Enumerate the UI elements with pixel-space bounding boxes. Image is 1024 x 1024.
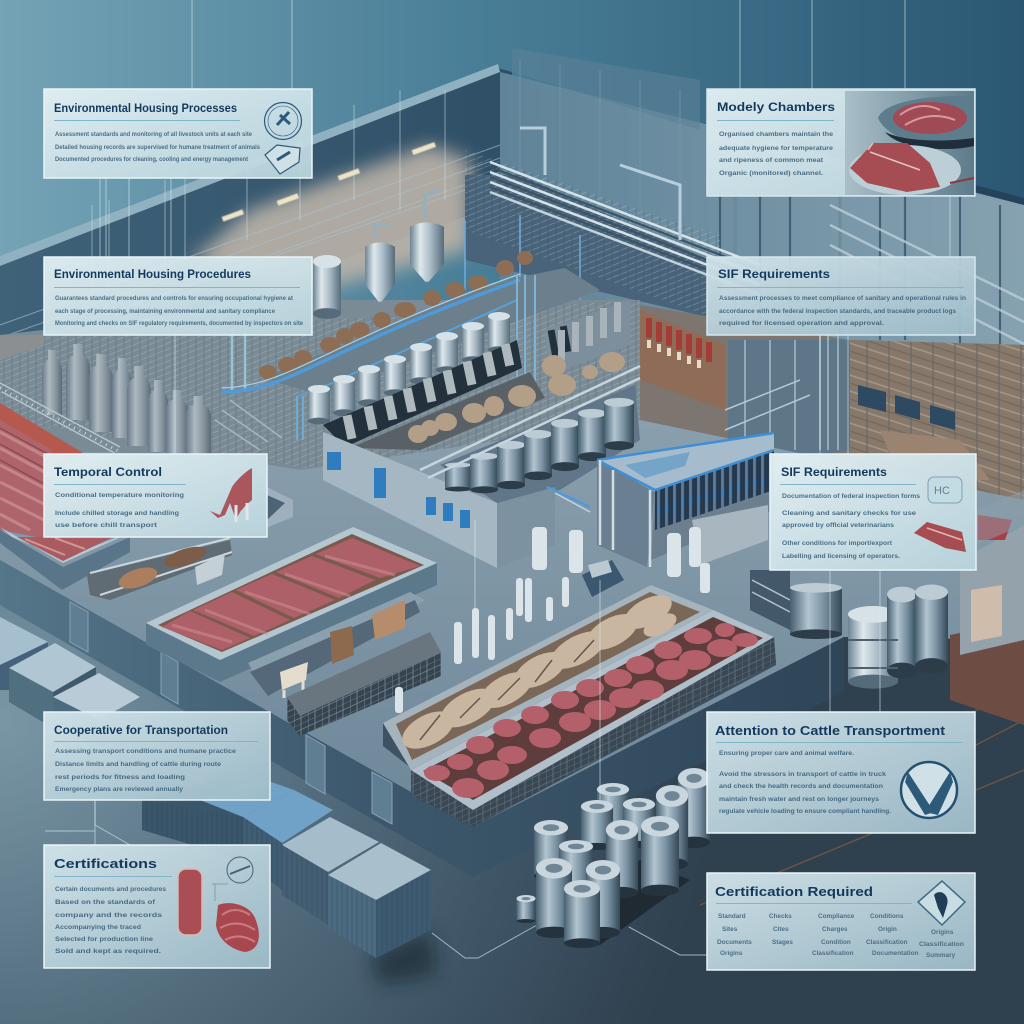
body text: Cleaning and sanitary checks for use bbox=[782, 510, 916, 517]
heading: Environmental Housing Processes bbox=[54, 103, 237, 115]
panel: cooperative for transportation bbox=[44, 712, 270, 800]
third box bbox=[243, 790, 333, 843]
body text: Organic (monitored) channel. bbox=[719, 170, 823, 177]
body text: Guarantees standard procedures and controls for ensuring occupational hygiene at bbox=[55, 295, 294, 302]
body text: adequate hygiene for temperature bbox=[719, 145, 833, 152]
lower containers bbox=[142, 777, 436, 985]
icon: diamond badge bbox=[918, 881, 965, 925]
body text: each stage of processing, maintaining environmental and sanitary compliance bbox=[55, 308, 275, 315]
mid band of machinery bbox=[0, 300, 640, 480]
body text: Assessment standards and monitoring of all livestock units at each site bbox=[55, 131, 252, 138]
body text: approved by official veterinarians bbox=[782, 522, 894, 529]
requirements table: Origins bbox=[931, 929, 954, 936]
heading: Attention to Cattle Transportment bbox=[715, 723, 946, 738]
dark crate conveyor bbox=[287, 632, 441, 736]
workers bbox=[395, 527, 710, 713]
body text bbox=[719, 750, 891, 815]
body text: use before chill transport bbox=[55, 522, 158, 529]
icon: meat cuts and blade bbox=[178, 857, 259, 952]
icon: seals bbox=[264, 102, 302, 174]
requirements table: Documentation bbox=[872, 950, 919, 957]
requirements table: Classification bbox=[812, 950, 854, 957]
heading: Certifications bbox=[54, 857, 157, 871]
requirements table: Documents bbox=[717, 939, 752, 946]
conveyor with livestock bbox=[248, 592, 425, 698]
body text: Labelling and licensing of operators. bbox=[782, 553, 900, 560]
body text bbox=[55, 748, 236, 793]
body text bbox=[55, 131, 260, 163]
blue framed rig bbox=[597, 433, 790, 630]
heading: SIF Requirements bbox=[718, 267, 830, 281]
heading: Certification Required bbox=[715, 884, 873, 899]
requirements table bbox=[717, 913, 964, 959]
heading: Temporal Control bbox=[54, 465, 162, 479]
body text: Sold and kept as required. bbox=[55, 948, 161, 955]
body text: Include chilled storage and handling bbox=[55, 510, 179, 517]
body text: Emergency plans are reviewed annually bbox=[55, 786, 183, 793]
body text: Assessing transport conditions and humane practice bbox=[55, 748, 236, 755]
body text bbox=[782, 493, 920, 560]
requirements table: Summary bbox=[926, 952, 956, 959]
body text: Distance limits and handling of cattle during route bbox=[55, 761, 221, 768]
panel: SIF requirements bbox=[707, 257, 975, 335]
body text: Selected for production line bbox=[55, 936, 153, 943]
large meat tray center left bbox=[146, 527, 437, 682]
panel: SIF requirements with meat bbox=[770, 454, 976, 570]
red meat cuts tray bbox=[411, 610, 776, 827]
top left red meat tray bbox=[0, 403, 83, 540]
requirements table: Stages bbox=[772, 939, 793, 946]
body text: rest periods for fitness and loading bbox=[55, 774, 185, 781]
body text: Based on the standards of bbox=[55, 899, 156, 906]
heading: Modely Chambers bbox=[717, 100, 835, 114]
body text: company and the records bbox=[55, 912, 162, 919]
icon: cow bbox=[210, 468, 252, 522]
body text: Ensuring proper care and animal welfare. bbox=[719, 750, 854, 757]
icon: crossed knives bbox=[901, 762, 957, 818]
warm processing hall right bbox=[640, 305, 1024, 520]
factory rear wall bbox=[0, 64, 512, 380]
body text: and check the health records and documentation bbox=[719, 783, 883, 790]
body text: Monitoring and checks on SIF regulatory requirements, documented by inspectors on site bbox=[55, 320, 303, 327]
main platform floor bbox=[0, 420, 1024, 877]
body text: Certain documents and procedures bbox=[55, 886, 166, 893]
central tanks and dark pens bbox=[308, 300, 630, 450]
panel: certification required bbox=[707, 873, 975, 970]
body text bbox=[55, 492, 184, 529]
panel: environmental housing processes bbox=[44, 89, 312, 178]
central processing block bbox=[323, 366, 640, 568]
body text: required for licensed operation and approval. bbox=[719, 320, 884, 327]
panel: certifications bbox=[44, 845, 270, 968]
heading: Environmental Housing Procedures bbox=[54, 269, 251, 281]
body text: Accompanying the traced bbox=[55, 924, 141, 931]
requirements table: Sites bbox=[722, 926, 738, 933]
left lower meat tray bbox=[0, 487, 293, 590]
requirements table: Classification bbox=[866, 939, 908, 946]
panel: temperature control bbox=[44, 454, 267, 537]
photo: meat on plates bbox=[845, 91, 974, 195]
sheep on the floor bbox=[408, 352, 625, 443]
body text bbox=[55, 295, 303, 327]
tanks back left row bbox=[0, 330, 282, 458]
brown floor and far right building bbox=[950, 490, 1024, 725]
body text: Conditional temperature monitoring bbox=[55, 492, 184, 499]
panel connector lines bbox=[95, 0, 950, 845]
body text bbox=[55, 886, 166, 955]
upper left containers bbox=[0, 617, 140, 745]
requirements table: Classification bbox=[919, 941, 964, 948]
body text: and ripeness of common meat bbox=[719, 157, 824, 164]
body text: accordance with the federal inspection standards, and traceable product logs bbox=[719, 308, 956, 315]
body text bbox=[719, 295, 966, 327]
requirements table: Origin bbox=[878, 926, 897, 933]
front box bbox=[370, 930, 436, 985]
requirements table: Cites bbox=[773, 926, 789, 933]
body text: Detailed housing records are supervised for humane treatment of animals bbox=[55, 144, 260, 151]
body text: maintain fresh water and rest on longer journeys bbox=[719, 796, 879, 803]
requirements table: Compliance bbox=[818, 913, 855, 920]
requirements table: Origins bbox=[720, 950, 743, 957]
heading: Cooperative for Transportation bbox=[54, 723, 228, 737]
body text: Avoid the stressors in transport of cattle in truck bbox=[719, 771, 886, 778]
panel: attention to cattle transport bbox=[707, 712, 975, 833]
body text: Documentation of federal inspection forms bbox=[782, 493, 920, 500]
body text: Organised chambers maintain the bbox=[719, 131, 833, 138]
glass wall right bbox=[500, 48, 1024, 470]
second box bbox=[282, 817, 379, 872]
dark machinery recess and upper pipe bands bbox=[465, 128, 760, 320]
panel: quality chambers bbox=[707, 89, 975, 196]
right steel tanks bbox=[790, 583, 948, 689]
body text bbox=[719, 131, 833, 177]
panel: environmental housing procedures bbox=[44, 257, 312, 335]
steel canisters bbox=[516, 768, 710, 948]
requirements table: Charges bbox=[822, 926, 848, 933]
conveyor with cattle left bbox=[87, 538, 232, 600]
body text: Assessment processes to meet compliance of sanitary and operational rules in bbox=[719, 295, 966, 302]
cable lines on floor bbox=[45, 800, 707, 958]
poultry tray bbox=[383, 585, 713, 800]
icon: seal and meat bbox=[914, 477, 966, 552]
cattle conveyor with blue lines bbox=[222, 251, 600, 440]
heading: SIF Requirements bbox=[781, 465, 887, 479]
large process vessels bbox=[313, 190, 444, 319]
requirements table: Checks bbox=[769, 913, 792, 920]
requirements table: Condition bbox=[821, 939, 851, 946]
requirements table: Conditions bbox=[870, 913, 904, 920]
body text: Documented procedures for cleaning, cooling and energy management bbox=[55, 156, 249, 163]
icon: seal and meat: HC bbox=[934, 485, 950, 497]
body text: regulate vehicle loading to ensure compliant handling. bbox=[719, 808, 891, 815]
body text: Other conditions for import/export bbox=[782, 540, 893, 547]
requirements table: Standard bbox=[718, 913, 746, 920]
